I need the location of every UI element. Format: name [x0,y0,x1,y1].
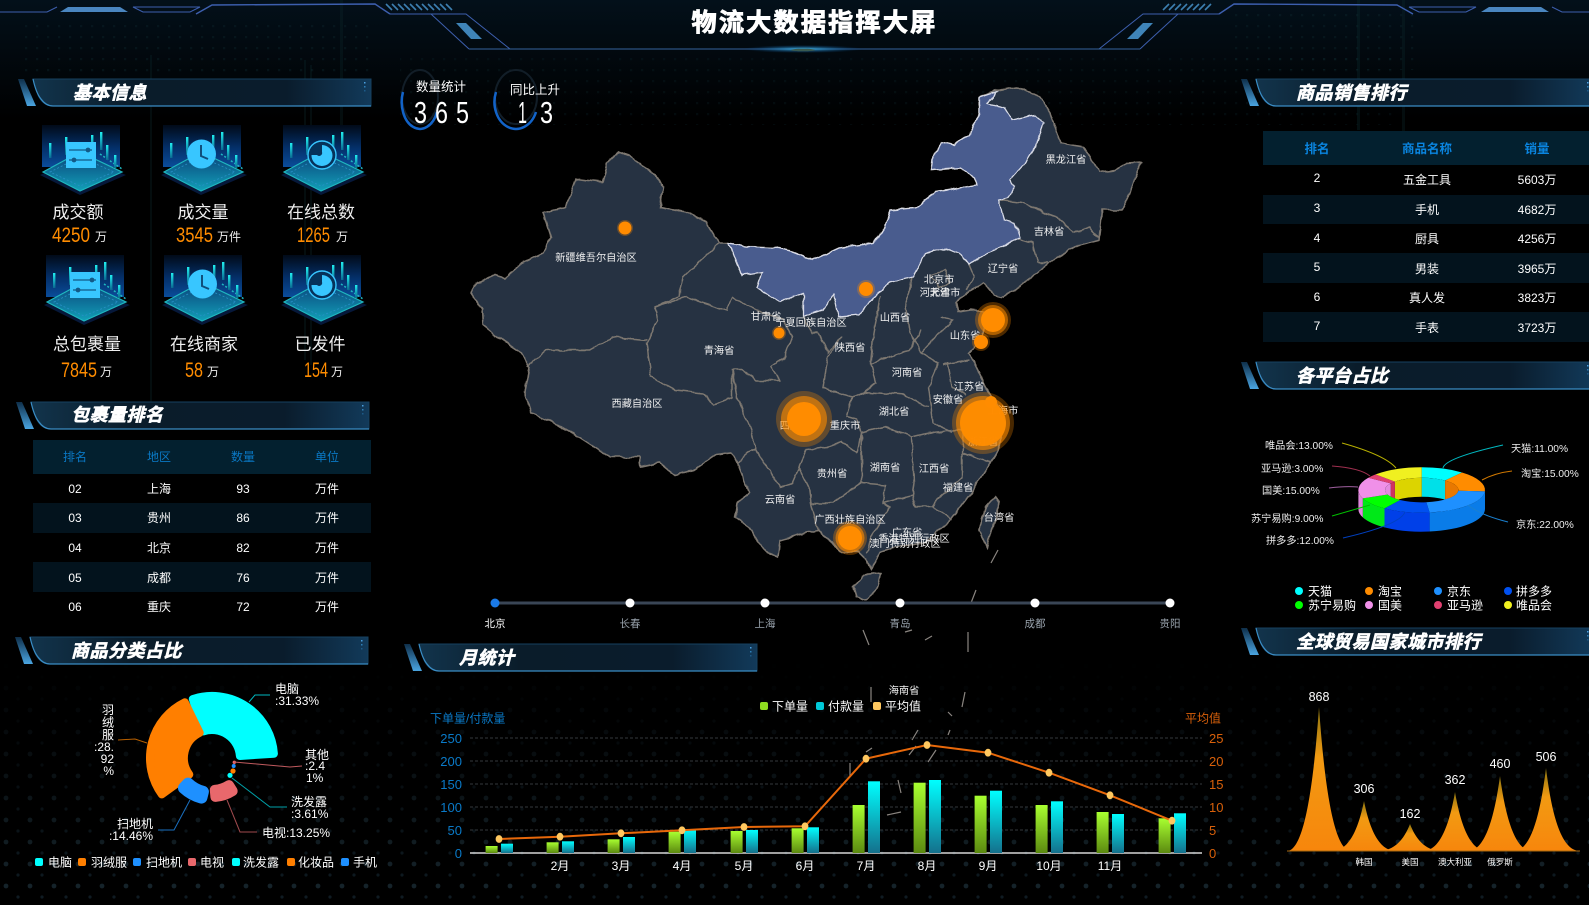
map labels: 福建省 [943,481,973,494]
heading: category share [15,637,368,664]
table: parcel ranking: 万件 [315,511,339,525]
map labels: 四川省 [780,419,810,432]
table: product sales: 4256万 [1518,232,1556,246]
callouts: category labels: % [103,764,114,778]
callouts: platform labels: 国美:15.00% [1262,484,1320,497]
legend: platforms: 唯品会 [1516,598,1552,612]
timeline: 北京 [484,617,506,630]
map labels: 湖北省 [879,405,909,418]
chart: monthly bars and line: 200 [440,754,462,769]
table: parcel ranking: 93 [236,482,250,496]
map labels: 北京市 [924,273,954,286]
table: parcel ranking: 数量 [231,449,255,464]
legend: platforms: 国美 [1378,598,1402,612]
table: product sales: 真人发 [1409,290,1445,305]
heading: platform share: 各平台占比 [1296,366,1390,386]
map labels: 香港特别行政区 [878,532,950,545]
table: product sales: 五金工具 [1403,172,1451,187]
chart: peak bars: 162 [1400,807,1420,821]
chart: monthly bars and line: 9月 [979,859,997,873]
table: parcel ranking: 万件 [315,541,339,555]
chart: peak bars: 俄罗斯 [1487,857,1513,867]
panel: parcel ranking [16,402,371,614]
chart: monthly bars and line: 10 [1209,800,1223,815]
legend: categories: 羽绒服 [91,856,127,870]
table: product sales: 商品名称 [1402,141,1452,156]
timeline: 青岛 [890,617,910,630]
chart: monthly bars and line: 5 [1209,823,1216,838]
table: parcel ranking: 76 [236,571,250,585]
heading: category share: 商品分类占比 [71,641,183,661]
chart: peak bars: 362 [1445,773,1465,787]
map labels: 安徽省 [933,393,963,406]
callouts: platform labels: 苏宁易购:9.00% [1251,512,1323,525]
table: product sales: 手机 [1415,203,1439,217]
chart: monthly bars and line: 15 [1209,777,1223,792]
table: product sales: 销量 [1524,141,1550,156]
legend: platforms: 淘宝 [1378,584,1402,598]
table: parcel ranking: 上海 [147,481,171,496]
chart: monthly bars and line: 8月 [918,859,936,873]
chart: monthly bars and line: 20 [1209,754,1223,769]
callouts: platform labels: 京东:22.00% [1516,518,1574,531]
South China Sea islands [850,550,998,815]
stat: shipped: 万 [331,365,343,379]
table: parcel ranking [33,440,371,614]
panel: platform share [1241,362,1589,612]
timeline [484,598,1180,630]
table: product sales: 厨具 [1415,232,1439,246]
callouts: platform labels: 淘宝:15.00% [1521,467,1579,480]
chart: monthly bars and line [430,710,1223,873]
chart: monthly bars and line: 50 [448,823,462,838]
chart: monthly bars and line: 0 [1209,846,1216,861]
chart: monthly bars and line: 7月 [857,859,875,873]
legend: monthly: 付款量 [828,700,864,714]
table: parcel ranking: 贵州 [147,511,171,525]
heading: global trade: 全球贸易国家城市排行 [1296,632,1483,652]
stat: total parcels [44,255,130,382]
legend: monthly: 下单量 [772,700,808,714]
stat: volume: 成交量 [178,203,228,222]
legend: categories: 电脑 [48,856,72,870]
chart: monthly bars and line: 4月 [673,859,691,873]
table: parcel ranking: 重庆 [147,600,171,614]
callouts: category labels: 电脑 [275,682,299,696]
stat: year on year: 1 [518,95,527,130]
chart: monthly bars and line: 100 [440,800,462,815]
map: China provinces [471,87,1142,815]
callouts: category labels [94,682,330,843]
callouts: category labels: :3.61% [291,807,329,821]
callouts: platform labels: 天猫:11.00% [1511,442,1568,455]
stat: volume: 万件 [217,230,241,244]
heading: basic info: 基本信息 [73,83,147,103]
panel: product sales ranking [1241,79,1589,342]
legend: monthly [760,698,921,714]
chart: monthly bars and line: 6月 [796,859,814,873]
legend: monthly: 平均值 [885,698,921,714]
table: parcel ranking: 单位 [315,449,339,464]
stat: online merchants: 在线商家 [170,335,238,354]
stat: quantity count: 6 [435,95,448,130]
legend: platforms [1295,584,1552,612]
chart: monthly bars and line: 11月 [1098,859,1122,873]
map labels: 重庆市 [830,419,860,432]
chart: rose donut [150,696,274,798]
table: product sales: 2 [1314,171,1321,185]
table: parcel ranking: 72 [236,600,250,614]
map labels: 天津市 [930,286,960,299]
map labels: 青海省 [704,344,734,357]
map labels: 澳门特别行政区 [869,537,941,550]
chart: peak bars: 460 [1490,757,1510,771]
legend: categories [35,854,377,870]
map labels: 贵州省 [817,467,847,480]
legend: platforms: 苏宁易购 [1308,598,1356,612]
callouts: platform labels [1251,439,1579,547]
table: parcel ranking: 成都 [147,571,171,585]
table: product sales: 3965万 [1518,262,1556,276]
table: product sales: 排名 [1304,141,1330,156]
stat: turnover: 万 [95,230,107,244]
panel: global trade ranking [1241,628,1589,867]
stat: online merchants [162,255,248,382]
chart: monthly bars and line: 250 [440,731,462,746]
table: product sales: 4682万 [1518,203,1556,217]
heading: monthly stats [404,644,757,671]
chart: 3D donut [1358,467,1485,532]
table: parcel ranking: 05 [68,571,82,585]
stat: volume [161,125,247,247]
chart: peak bars: 美国 [1401,857,1419,867]
stat: volume: 3545 [176,224,213,247]
map labels: 广西壮族自治区 [814,513,886,526]
chart: peak bars: 澳大利亚 [1438,857,1472,867]
stat: online total [281,125,367,247]
map labels: 新疆维吾尔自治区 [555,251,637,264]
stat: turnover: 4250 [52,224,90,247]
map labels: 江苏省 [954,380,984,393]
heading: basic info [18,79,371,106]
map labels: 广东省 [892,526,922,539]
map labels: 山西省 [880,311,910,324]
callouts: category labels: 92 [101,752,114,766]
callouts: category labels: 1% [306,771,324,785]
table: parcel ranking: 万件 [315,482,339,496]
province highlight: Inner Mongolia [729,92,1044,317]
table: parcel ranking: 03 [68,511,82,525]
chart: peak bars: 306 [1354,782,1374,796]
table: parcel ranking: 04 [68,541,82,555]
table: product sales: 3 [1314,201,1321,215]
heading: platform share [1241,362,1589,389]
chart: peak bars: 506 [1536,750,1556,764]
stat: online total: 在线总数 [287,203,355,222]
map labels: 台湾省 [984,511,1014,524]
table: product sales: 3723万 [1518,321,1556,335]
panel: basic info [18,79,371,382]
panel: category share [15,637,377,870]
map labels: 河北省 [920,286,950,299]
table: parcel ranking: 万件 [315,600,339,614]
heading: parcel ranking [16,402,369,429]
timeline: 贵阳 [1160,617,1180,630]
callouts: category labels: 羽 [102,703,114,717]
stat: online total: 万 [336,230,348,244]
stat: online merchants: 58 [185,359,203,382]
map labels: 西藏自治区 [612,397,662,410]
legend: categories: 电视 [200,854,224,870]
stat: online merchants: 万 [207,365,219,379]
chart: peak bars: 韩国 [1355,857,1373,867]
table: product sales: 4 [1314,231,1321,245]
table: parcel ranking: 地区 [147,450,171,464]
panel: monthly stats [404,644,1223,873]
timeline: 上海 [754,617,776,630]
table: parcel ranking: 86 [236,511,250,525]
title: 物流大数据指挥大屏 [692,9,938,37]
table: parcel ranking: 82 [236,541,250,555]
callouts: category labels: 绒 [102,716,114,730]
callouts: category labels: 服 [102,728,114,742]
chart: monthly bars and line: 5月 [735,859,753,873]
stat: quantity count [402,70,469,130]
table: product sales: 3823万 [1518,291,1556,305]
table: product sales: 7 [1314,319,1321,333]
stat: turnover: 成交额 [52,203,104,222]
map labels: 江西省 [919,462,949,475]
callouts: platform labels: 亚马逊:3.00% [1261,463,1323,475]
chart: monthly bars and line: 3月 [612,859,630,873]
map labels: 湖南省 [870,461,900,474]
chart: monthly bars and line: 10月 [1036,859,1062,873]
stat: online total: 1265 [297,224,330,247]
chart: monthly bars and line: 2月 [551,859,569,873]
stat: year on year: 同比上升 [510,83,560,97]
map labels: 辽宁省 [988,262,1018,275]
callouts: category labels: 电视:13.25% [262,825,330,840]
map labels: 陕西省 [835,341,865,354]
legend: categories: 化妆品 [298,856,334,870]
stat: shipped [281,255,367,382]
map markers [617,220,1014,555]
stat: total parcels: 万 [100,365,112,379]
heading: parcel ranking: 包裹量排名 [71,405,164,425]
stat: quantity count: 3 [414,95,427,130]
chart: monthly bars and line: 150 [440,777,462,792]
legend: categories: 扫地机 [146,856,182,870]
map labels: 吉林省 [1034,225,1064,238]
stat: total parcels: 7845 [61,359,97,382]
table: parcel ranking: 06 [68,600,82,614]
heading: product sales [1241,79,1589,106]
chart: monthly bars and line: 25 [1209,731,1223,746]
table: product sales: 男装 [1415,262,1439,276]
callouts: category labels: :31.33% [275,694,319,708]
table: product sales: 手表 [1415,321,1439,335]
chart: monthly bars and line: 0 [455,846,462,861]
legend: platforms: 天猫 [1308,584,1332,598]
chart: peak bars [1287,690,1580,867]
table: parcel ranking: 万件 [315,571,339,585]
stat: quantity count: 数量统计 [416,79,466,94]
callouts: category labels: :2.4 [305,759,325,773]
stat: year on year [494,70,560,130]
table: product sales: 6 [1314,290,1321,304]
callouts: category labels: :28. [94,740,114,754]
map labels: 海南省 [889,684,919,697]
table: parcel ranking: 北京 [147,541,171,555]
table: parcel ranking: 排名 [63,449,87,464]
stat: turnover [40,125,126,247]
map labels: 上海市 [988,404,1018,417]
table: product sales: 5 [1314,260,1321,274]
stat: quantity count: 5 [456,95,469,130]
map labels: 山东省 [950,329,980,342]
legend: platforms: 京东 [1447,584,1471,598]
timeline: 长春 [620,618,641,630]
callouts: category labels: :14.46% [109,829,153,843]
legend: platforms: 亚马逊 [1447,598,1483,612]
table: parcel ranking: 02 [68,482,82,496]
chart: peak bars: 868 [1309,690,1329,704]
callouts: platform labels: 唯品会:13.00% [1265,439,1333,452]
map labels: 黑龙江省 [1046,153,1086,166]
callouts: category labels: 洗发露 [291,794,327,809]
legend: categories: 手机 [353,856,377,870]
map labels [555,153,1086,697]
map shapes [471,87,1142,600]
stat: shipped: 154 [304,359,328,382]
map labels: 河南省 [892,366,922,379]
heading: monthly stats: 月统计 [459,648,516,668]
map labels: 宁夏回族自治区 [775,316,847,329]
heading: product sales: 商品销售排行 [1296,83,1409,103]
callouts: category labels: 其他 [305,748,329,762]
table: product sales: 5603万 [1518,173,1556,187]
timeline: 成都 [1024,618,1046,630]
callouts: platform labels: 拼多多:12.00% [1266,534,1334,547]
map labels: 浙江省 [968,435,998,448]
stat: total parcels: 总包裹量 [53,335,121,354]
stat: shipped: 已发件 [294,335,346,354]
chart: monthly bars and line: 平均值 [1185,710,1221,726]
legend: categories: 洗发露 [243,854,279,870]
chart: monthly bars and line: 下单量/付款量 [430,712,505,726]
table: product sales [1263,131,1589,342]
map labels: 甘肃省 [751,310,781,323]
map labels: 云南省 [765,493,795,506]
top header frame [0,4,1589,53]
legend: platforms: 拼多多 [1516,584,1552,598]
callouts: category labels: 扫地机 [117,817,153,831]
heading: global trade [1241,628,1589,655]
stat: year on year: 3 [540,95,553,130]
